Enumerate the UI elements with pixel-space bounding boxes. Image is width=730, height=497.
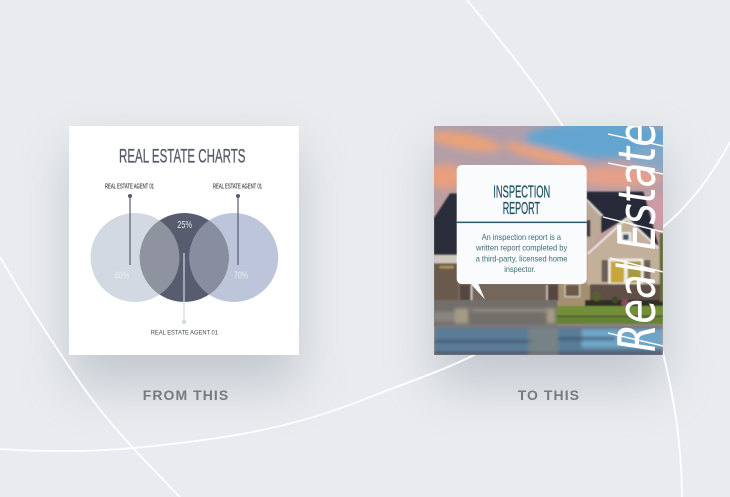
gable wall bbox=[588, 219, 660, 285]
bubble body text: a third-party, licensed home bbox=[476, 253, 568, 263]
value: 25%: 25% bbox=[177, 220, 192, 231]
bubble body text bbox=[475, 232, 568, 274]
script flourishes bbox=[603, 134, 663, 346]
bubble body text: An inspection report is a bbox=[482, 232, 561, 242]
left roof and wall bbox=[434, 193, 458, 255]
attic window bbox=[620, 232, 631, 243]
value: 70%: 70% bbox=[234, 270, 248, 281]
chart title: REAL ESTATE CHARTS bbox=[119, 145, 246, 167]
label: from this: FROM THIS bbox=[143, 387, 228, 403]
garage and stone pillars bbox=[458, 283, 558, 301]
lawn bbox=[557, 306, 663, 315]
speech bubble bbox=[457, 165, 587, 300]
wet road bbox=[434, 328, 663, 355]
stone base bbox=[590, 284, 661, 302]
bubble body text: written report completed by bbox=[475, 243, 568, 253]
panel: to this social post bbox=[434, 126, 663, 355]
house photo bbox=[434, 126, 663, 355]
left callout: REAL ESTATE AGENT 01 bbox=[105, 183, 154, 190]
script lettering: Real Estate bbox=[608, 122, 668, 352]
bottom callout bbox=[151, 253, 218, 337]
bubble heading: INSPECTION bbox=[493, 181, 550, 201]
value: 60%: 60% bbox=[115, 270, 129, 281]
right callout bbox=[213, 183, 262, 265]
panel: from this chart card bbox=[69, 126, 299, 355]
venn diagram bbox=[90, 213, 278, 302]
bubble heading: REPORT bbox=[503, 198, 540, 218]
label: to this: TO THIS bbox=[518, 387, 579, 403]
windows bbox=[602, 260, 608, 282]
right roof bbox=[587, 192, 658, 245]
driveway bbox=[434, 300, 558, 327]
bubble body text: inspector. bbox=[504, 264, 536, 274]
bottom callout: REAL ESTATE AGENT 01 bbox=[151, 330, 218, 337]
left callout bbox=[105, 183, 154, 265]
right callout: REAL ESTATE AGENT 01 bbox=[213, 183, 262, 190]
card shadows bbox=[70, 150, 663, 385]
bubble heading bbox=[493, 181, 550, 218]
